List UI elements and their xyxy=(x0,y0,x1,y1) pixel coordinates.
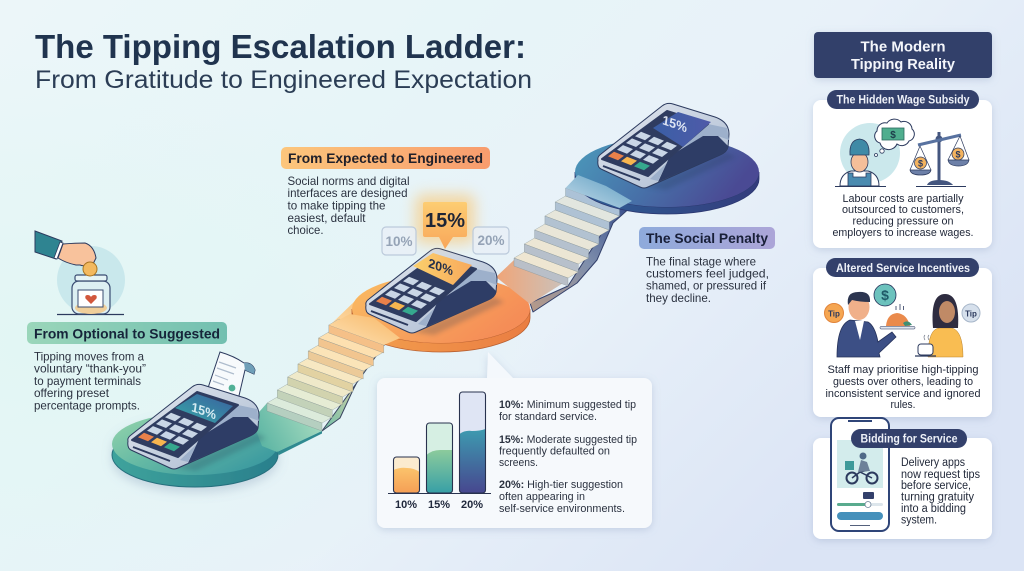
text: step two description: choice. xyxy=(288,223,324,237)
terminal: second with 20 percent screen xyxy=(366,248,504,335)
text: chart legend: 20%: High-tier suggestion xyxy=(499,479,623,491)
bar chart xyxy=(388,392,491,511)
bar chart: 15% xyxy=(428,499,450,511)
text: step two description: Social norms and digital xyxy=(288,174,410,188)
icon: tip jar and hand xyxy=(35,231,125,314)
icon: balance scale xyxy=(910,132,969,186)
icon: guest with coffee: Tip xyxy=(965,310,977,318)
staircase: green to orange xyxy=(252,300,403,455)
title xyxy=(35,28,532,94)
text: service incentives description: guests over others, leading to xyxy=(833,376,973,388)
pill heading: Bidding for Service xyxy=(860,434,958,446)
heading: the modern tipping reality: The Modern xyxy=(860,40,946,56)
text: service incentives description xyxy=(826,364,980,411)
title: The Tipping Escalation Ladder: xyxy=(35,28,526,65)
panel: step three label: The Social Penalty xyxy=(646,230,768,246)
text: wage subsidy description: outsourced to customers, xyxy=(842,204,964,216)
text: step one description: voluntary “thank-you” xyxy=(34,362,146,376)
text: bidding description: turning gratuity xyxy=(901,492,974,504)
terminal: third on blue disc: 15% xyxy=(662,112,688,136)
icon: guest with coffee xyxy=(915,294,980,357)
pill heading: The Hidden Wage Subsidy xyxy=(836,94,970,106)
icon: worker with thought bubble xyxy=(835,119,914,186)
callout: tip options: 20% xyxy=(477,233,505,248)
text: wage subsidy description xyxy=(832,193,974,239)
terminal: third on blue disc xyxy=(598,103,736,190)
callout: tip options: 10% xyxy=(385,234,413,249)
text: chart legend: screens. xyxy=(499,457,538,469)
panel: step two label xyxy=(281,147,490,169)
bar chart: 10% xyxy=(395,499,417,511)
icon: waiter serving food: $ xyxy=(881,287,889,303)
text: step one description: Tipping moves from a xyxy=(34,350,144,364)
pill heading xyxy=(826,258,979,277)
text: service incentives description: inconsistent service and ignored xyxy=(826,388,980,400)
text: bidding description: Delivery apps xyxy=(901,457,965,469)
text: step three description xyxy=(646,254,769,305)
text: bidding description: into a bidding xyxy=(901,503,966,515)
text: chart legend: for standard service. xyxy=(499,411,597,423)
text: wage subsidy description: reducing pressure on xyxy=(852,216,954,228)
text: chart legend: 10%: Minimum suggested tip xyxy=(499,399,636,411)
panel: tip percentage chart xyxy=(377,352,652,528)
text: wage subsidy description: employers to increase wages. xyxy=(832,227,974,239)
platform: orange disc xyxy=(329,275,530,352)
bar chart: 20% xyxy=(461,499,483,511)
panel: step three label xyxy=(639,227,775,249)
pill heading xyxy=(827,90,979,109)
text: step three description: they decline. xyxy=(646,291,711,305)
text: step two description xyxy=(288,174,410,237)
text: step three description: The final stage where xyxy=(646,254,756,268)
text: chart legend: 15%: Moderate suggested tip xyxy=(499,434,637,446)
icon: phone with delivery app xyxy=(831,418,889,531)
callout: tip options xyxy=(382,194,509,255)
terminal: first with receipt: 15% xyxy=(191,399,217,423)
icon: waiter serving food xyxy=(824,284,915,357)
panel: step one label: From Optional to Suggested xyxy=(34,326,220,342)
panel: altered service incentives xyxy=(813,258,992,417)
icon: worker with thought bubble: $ xyxy=(890,130,896,141)
text: step one description: offering preset xyxy=(34,386,110,400)
icon: balance scale: $ xyxy=(955,150,961,160)
icon: balance scale: $ xyxy=(918,158,923,168)
text: wage subsidy description: Labour costs are partially xyxy=(842,193,964,205)
pill heading: Altered Service Incentives xyxy=(836,263,970,275)
text: bidding description xyxy=(901,457,980,526)
callout: tip options: 15% xyxy=(425,210,465,232)
text: step three description: shamed, or pressured if xyxy=(646,278,767,292)
text: step one description xyxy=(34,350,146,412)
text: step two description: to make tipping the xyxy=(288,198,386,212)
panel: step two label: From Expected to Engineered xyxy=(288,150,483,166)
pill heading xyxy=(851,429,967,448)
text: bidding description: system. xyxy=(901,514,937,526)
text: chart legend: frequently defaulted on xyxy=(499,446,610,458)
text: service incentives description: Staff may prioritise high-tipping xyxy=(828,364,978,376)
panel: step one label xyxy=(27,322,227,344)
text: service incentives description: rules. xyxy=(890,399,916,411)
platform: blue disc xyxy=(566,137,759,214)
text: chart legend xyxy=(499,399,637,515)
platform: green disc xyxy=(112,413,278,487)
heading: the modern tipping reality: Tipping Reality xyxy=(851,57,955,73)
icon: waiter serving food: Tip xyxy=(828,310,840,318)
panel: the hidden wage subsidy xyxy=(813,90,992,248)
text: step three description: customers feel judged, xyxy=(646,266,769,280)
text: bidding description: now request tips xyxy=(901,469,980,481)
terminal: first with receipt xyxy=(128,352,266,471)
text: step two description: interfaces are designed xyxy=(288,186,408,200)
text: step one description: to payment terminals xyxy=(34,374,141,388)
text: step one description: percentage prompts. xyxy=(34,398,140,412)
staircase: orange to blue xyxy=(496,188,633,312)
text: chart legend: often appearing in xyxy=(499,491,585,503)
terminal: second with 20 percent screen: 20% xyxy=(428,255,454,279)
heading: the modern tipping reality xyxy=(814,32,992,78)
title: From Gratitude to Engineered Expectation xyxy=(35,66,532,94)
panel: bidding for service xyxy=(813,418,992,539)
text: chart legend: self-service environments. xyxy=(499,503,625,515)
text: bidding description: before service, xyxy=(901,480,971,492)
text: step two description: easiest, default xyxy=(288,211,366,225)
receipt xyxy=(208,352,255,400)
